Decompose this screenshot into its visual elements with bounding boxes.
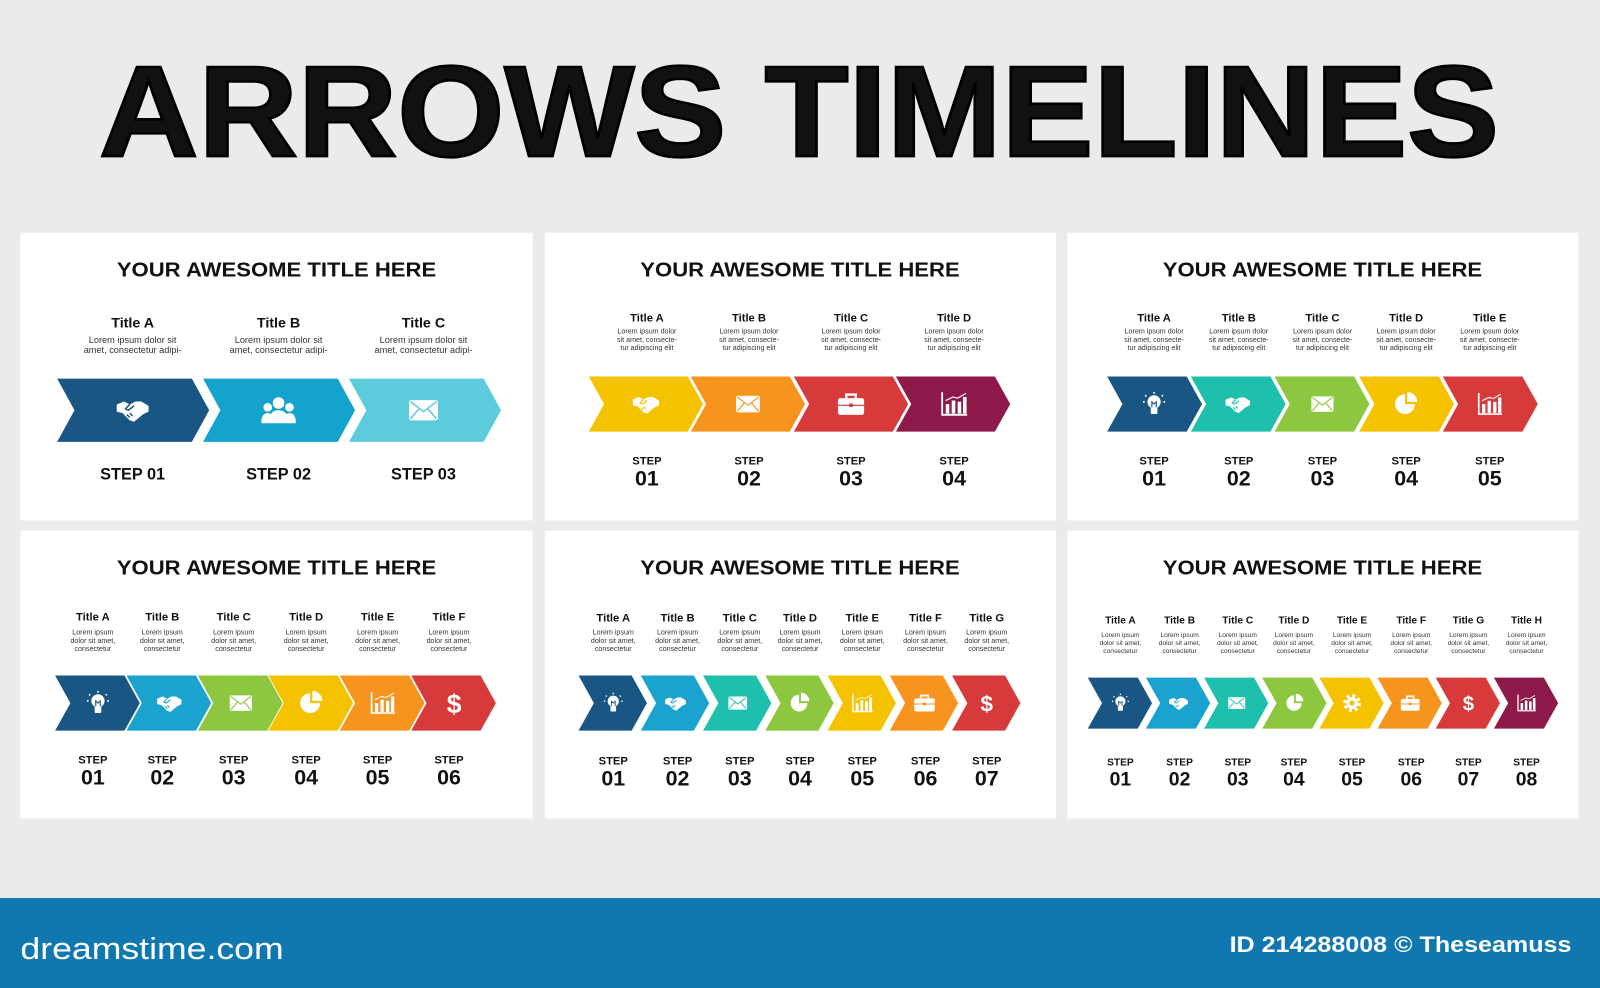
step titles: Title B	[145, 611, 179, 623]
step titles: Lorem ipsum	[1333, 632, 1372, 639]
step titles: dolor sit amet,	[1273, 640, 1315, 647]
step titles: tur adipiscing elit	[1380, 344, 1433, 352]
step titles: Title E	[1473, 312, 1507, 324]
step titles: Title C	[402, 316, 445, 332]
step titles: Lorem ipsum	[213, 629, 254, 637]
step titles: consectetur	[1277, 648, 1312, 655]
step labels: STEP	[148, 754, 177, 766]
step labels: 02	[150, 766, 174, 790]
step titles: Lorem ipsum	[1160, 632, 1199, 639]
step labels: 03	[222, 766, 246, 790]
step titles: Title A	[596, 612, 630, 624]
step labels: STEP	[725, 755, 755, 767]
step labels: 01	[601, 767, 625, 791]
step titles: Lorem ipsum	[72, 629, 114, 637]
step titles: Title D	[937, 312, 971, 324]
step labels: 05	[1478, 467, 1502, 491]
step labels: 01	[635, 467, 659, 491]
step titles: Title B	[661, 612, 695, 624]
step labels: 02	[737, 467, 761, 491]
step titles: Title A	[1137, 312, 1171, 324]
panel: 7 steps	[545, 531, 1056, 818]
step titles: consectetur	[782, 645, 819, 653]
step titles: dolor sit amet,	[1100, 640, 1141, 647]
step titles: sit amet, consecte-	[719, 336, 780, 344]
step titles: consectetur	[1509, 648, 1544, 655]
step labels: STEP	[1513, 757, 1540, 768]
step labels: STEP	[1224, 757, 1251, 768]
step titles: dolor sit amet,	[903, 637, 948, 645]
step labels: 05	[850, 767, 874, 791]
step labels: STEP	[1107, 757, 1134, 768]
step titles: Lorem ipsum	[428, 629, 470, 637]
step labels: 05	[1341, 769, 1363, 791]
step titles: consectetur	[907, 645, 945, 653]
step titles: dolor sit amet,	[778, 637, 822, 645]
step labels: 04	[1394, 467, 1418, 491]
step labels: 06	[914, 767, 938, 791]
step titles: Lorem ipsum	[779, 629, 821, 637]
step labels: STEP	[1166, 757, 1193, 768]
main title: ARROWS TIMELINES	[99, 40, 1499, 184]
step titles: dolor sit amet,	[140, 637, 185, 645]
step titles: Lorem ipsum	[905, 629, 946, 637]
step titles: consectetur	[144, 645, 181, 653]
step titles: tur adipiscing elit	[824, 344, 878, 352]
step titles: Lorem ipsum	[719, 629, 760, 637]
step labels: STEP	[663, 755, 693, 767]
step titles: Lorem ipsum dolor	[1460, 328, 1520, 336]
step titles: Lorem ipsum	[1507, 632, 1546, 639]
step titles: Lorem ipsum	[142, 629, 183, 637]
step titles: Title D	[1389, 312, 1423, 324]
step labels: STEP	[1281, 757, 1307, 768]
step titles: Title A	[76, 611, 110, 623]
step titles: Title A	[111, 316, 154, 332]
step labels	[599, 755, 1002, 791]
step titles: Title G	[969, 612, 1004, 624]
step labels	[100, 466, 456, 484]
step titles: sit amet, consecte-	[1376, 336, 1437, 344]
step labels: STEP	[599, 755, 628, 767]
step titles: sit amet, consecte-	[821, 336, 882, 344]
step titles: consectetur	[1335, 648, 1370, 655]
step labels: 06	[437, 766, 461, 790]
step labels: 04	[294, 766, 318, 790]
step labels: STEP	[363, 754, 393, 766]
panel: 6 steps	[20, 531, 533, 818]
step titles: Lorem ipsum dolor	[1125, 328, 1184, 336]
panel: 3 steps	[20, 233, 533, 520]
step titles: Title C	[1222, 615, 1254, 626]
step labels: 02	[666, 767, 690, 791]
panel heading: YOUR AWESOME TITLE HERE	[1163, 558, 1482, 580]
step titles: Title C	[723, 612, 757, 624]
step titles: dolor sit amet,	[1331, 640, 1373, 647]
panel heading: YOUR AWESOME TITLE HERE	[640, 260, 960, 282]
footer logo: dreamstime.com	[20, 932, 284, 966]
step titles: consectetur	[74, 645, 112, 653]
step titles: dolor sit amet,	[211, 637, 256, 645]
step titles: amet, consectetur adipi-	[84, 345, 182, 355]
step titles: Lorem ipsum	[1101, 632, 1140, 639]
step titles: tur adipiscing elit	[722, 344, 776, 352]
step titles: sit amet, consecte-	[1124, 336, 1185, 344]
step labels: 04	[788, 767, 812, 791]
step labels: STEP	[972, 755, 1002, 767]
step titles: Lorem ipsum	[966, 629, 1007, 637]
arrows	[1088, 678, 1558, 729]
step titles	[1124, 312, 1520, 352]
panel heading: YOUR AWESOME TITLE HERE	[117, 558, 436, 580]
step titles: dolor sit amet,	[717, 637, 762, 645]
step titles: sit amet, consecte-	[924, 336, 985, 344]
step labels: STEP	[848, 755, 877, 767]
panel heading: YOUR AWESOME TITLE HERE	[1163, 260, 1482, 282]
step titles: consectetur	[359, 645, 397, 653]
step labels: 05	[366, 766, 390, 790]
step titles: consectetur	[288, 645, 325, 653]
step labels: STEP	[1475, 455, 1505, 467]
step labels: 03	[1311, 467, 1334, 491]
step titles: dolor sit amet,	[840, 637, 885, 645]
step labels: STEP	[911, 755, 941, 767]
arrows	[589, 377, 1010, 432]
step titles: Title D	[289, 611, 323, 623]
step labels: STEP	[734, 455, 764, 467]
step titles: Title E	[1337, 615, 1367, 626]
step labels	[1107, 757, 1540, 791]
step titles: Lorem ipsum dolor	[1293, 328, 1353, 336]
step titles: Title C	[834, 312, 868, 324]
step titles: Lorem ipsum dolor sit	[89, 335, 177, 345]
step titles: Title F	[909, 612, 942, 624]
step labels: STEP	[1391, 455, 1421, 467]
step titles: Title B	[257, 316, 300, 332]
step titles: dolor sit amet,	[70, 637, 115, 645]
step titles: dolor sit amet,	[1159, 640, 1201, 647]
step titles: sit amet, consecte-	[1460, 336, 1520, 344]
step titles: tur adipiscing elit	[928, 344, 981, 352]
step labels: 03	[1227, 769, 1249, 791]
step titles: Title D	[1278, 615, 1309, 626]
footer credit: ID 214288008 © Theseamuss	[1230, 932, 1571, 957]
step titles: Lorem ipsum	[842, 629, 883, 637]
step titles: dolor sit amet,	[284, 637, 329, 645]
step labels: 08	[1516, 769, 1538, 791]
step labels: STEP	[291, 754, 321, 766]
step labels: 03	[728, 767, 752, 791]
step titles: Lorem ipsum	[286, 629, 327, 637]
step labels: 02	[1227, 467, 1251, 491]
step titles: sit amet, consecte-	[1293, 336, 1353, 344]
step labels: STEP	[836, 455, 866, 467]
step titles: Lorem ipsum	[357, 629, 398, 637]
step labels: STEP	[939, 455, 969, 467]
step labels: 01	[1110, 769, 1131, 791]
step titles: Lorem ipsum	[1449, 632, 1488, 639]
step titles: Title C	[1305, 312, 1339, 324]
step labels	[632, 455, 969, 491]
step titles: tur adipiscing elit	[1463, 344, 1516, 352]
step titles: dolor sit amet,	[655, 637, 700, 645]
step titles: Title F	[1396, 615, 1426, 626]
arrows	[1107, 377, 1538, 432]
step titles: dolor sit amet,	[964, 637, 1009, 645]
step titles: consectetur	[844, 645, 881, 653]
step titles: dolor sit amet,	[1390, 640, 1432, 647]
step titles	[84, 316, 472, 355]
step titles: Title G	[1453, 615, 1484, 626]
footer bar	[0, 898, 1600, 988]
step titles: dolor sit amet,	[1506, 640, 1547, 647]
step titles: amet, consectetur adipi-	[230, 345, 328, 355]
step labels: 01	[1142, 467, 1166, 491]
step labels: STEP	[1139, 455, 1169, 467]
step titles: Title E	[846, 612, 879, 624]
step labels: STEP 03	[391, 466, 456, 484]
step labels: 06	[1400, 769, 1422, 791]
step titles: Title B	[1164, 615, 1195, 626]
step labels: STEP	[1308, 455, 1338, 467]
arrows	[57, 379, 501, 442]
step titles: Lorem ipsum dolor sit	[380, 335, 468, 345]
step labels: STEP	[219, 754, 249, 766]
step titles: dolor sit amet,	[591, 637, 636, 645]
step labels: STEP	[78, 754, 108, 766]
step titles: Title A	[1105, 615, 1136, 626]
step titles: consectetur	[1451, 648, 1486, 655]
step titles: Title H	[1511, 615, 1542, 626]
step titles: Lorem ipsum dolor	[1209, 328, 1269, 336]
step titles: amet, consectetur adipi-	[375, 345, 472, 355]
step titles: Title A	[630, 312, 664, 324]
step titles: consectetur	[431, 645, 468, 653]
step labels: 07	[1458, 769, 1479, 791]
step titles: tur adipiscing elit	[1296, 344, 1349, 352]
panel: 5 steps	[1067, 233, 1579, 520]
panel: 8 steps	[1067, 531, 1579, 818]
step labels: 07	[975, 767, 999, 791]
step titles: consectetur	[721, 645, 759, 653]
step titles: Lorem ipsum dolor	[925, 328, 984, 336]
step titles	[617, 312, 985, 352]
step titles: consectetur	[659, 645, 697, 653]
step titles: dolor sit amet,	[427, 637, 471, 645]
panel: 4 steps	[545, 233, 1056, 520]
step titles: Lorem ipsum	[593, 629, 634, 637]
step titles: Lorem ipsum	[1219, 632, 1257, 639]
step titles	[1100, 615, 1547, 655]
step labels: 04	[1283, 769, 1305, 791]
step labels: 04	[942, 467, 966, 491]
step titles: tur adipiscing elit	[620, 344, 673, 352]
step titles: Lorem ipsum dolor	[617, 328, 677, 336]
step titles: Lorem ipsum dolor	[822, 328, 881, 336]
arrows	[55, 676, 496, 731]
step titles: Title B	[732, 312, 766, 324]
step titles: Title F	[433, 611, 466, 623]
step titles: sit amet, consecte-	[1209, 336, 1269, 344]
step titles	[591, 612, 1009, 653]
step titles: consectetur	[595, 645, 632, 653]
step titles: tur adipiscing elit	[1128, 344, 1181, 352]
step labels: STEP	[1455, 757, 1482, 768]
step titles: Title D	[783, 612, 817, 624]
step titles: consectetur	[215, 645, 253, 653]
step labels	[78, 754, 464, 790]
step titles: dolor sit amet,	[1448, 640, 1489, 647]
arrows	[579, 676, 1020, 731]
step labels: STEP	[1224, 455, 1254, 467]
step labels: 03	[839, 467, 863, 491]
step titles: Lorem ipsum dolor	[1377, 328, 1436, 336]
panel heading: YOUR AWESOME TITLE HERE	[117, 260, 436, 282]
step titles: Lorem ipsum	[1392, 632, 1431, 639]
step labels: STEP	[632, 455, 662, 467]
step labels: STEP	[1398, 757, 1425, 768]
step titles: Lorem ipsum	[657, 629, 698, 637]
step titles: consectetur	[1162, 648, 1198, 655]
step titles: consectetur	[968, 645, 1006, 653]
panel heading: YOUR AWESOME TITLE HERE	[640, 558, 960, 580]
step titles: tur adipiscing elit	[1212, 344, 1265, 352]
step titles: Lorem ipsum	[1275, 632, 1314, 639]
step labels: 02	[1169, 769, 1190, 791]
step titles: Title E	[361, 611, 395, 623]
step labels: STEP	[785, 755, 815, 767]
step titles: Lorem ipsum dolor	[719, 328, 779, 336]
step labels: STEP 01	[100, 466, 165, 484]
step titles: Lorem ipsum dolor sit	[235, 335, 323, 345]
step titles: Title B	[1222, 312, 1256, 324]
step labels: STEP 02	[246, 466, 311, 484]
step titles: consectetur	[1394, 648, 1429, 655]
step titles: dolor sit amet,	[355, 637, 400, 645]
step labels: 01	[81, 766, 105, 790]
step titles: sit amet, consecte-	[617, 336, 677, 344]
step titles: consectetur	[1103, 648, 1138, 655]
step titles: consectetur	[1221, 648, 1256, 655]
step labels: STEP	[434, 754, 464, 766]
step titles: dolor sit amet,	[1217, 640, 1259, 647]
step titles: Title C	[217, 611, 251, 623]
step labels: STEP	[1339, 757, 1366, 768]
step titles	[70, 611, 471, 653]
step labels	[1139, 455, 1505, 491]
